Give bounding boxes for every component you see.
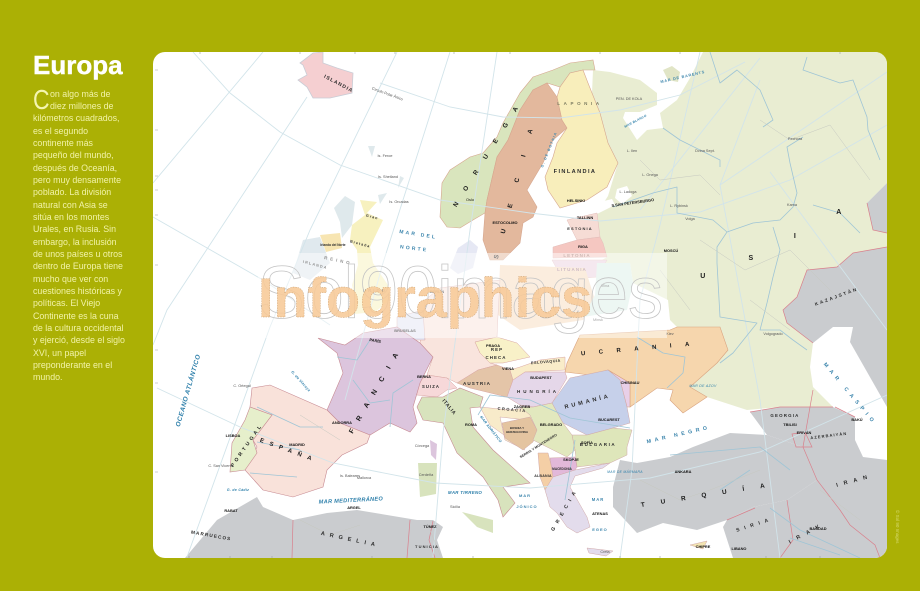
sea labels: MAR CASPIO — [822, 362, 878, 427]
geographic minor labels: Dvina Sept. — [695, 149, 715, 153]
land: other east borders — [292, 203, 887, 558]
capital and city labels: PRAGA — [486, 343, 500, 348]
text block: introduction: Urales, en Rusia. Sin — [33, 224, 116, 234]
country labels: LETONIA — [563, 253, 591, 258]
text block: introduction: y ejerció, desde el siglo — [33, 335, 125, 345]
capital and city labels: ANKARA — [675, 469, 692, 474]
text block: introduction: pero muy densamente — [33, 175, 121, 185]
capital and city labels: CHIPRE — [696, 544, 711, 549]
geographic minor labels: Creta — [600, 550, 611, 554]
geographic minor labels: Vilna — [601, 284, 610, 288]
land: Iceland — [298, 52, 353, 98]
sea labels: NORTE — [400, 244, 429, 254]
country labels: FRANCIA — [348, 344, 405, 435]
country labels: ITALIA — [440, 398, 457, 416]
country labels: SERBIA Y MONTENEGRO — [519, 433, 558, 459]
capital and city labels: ZAGREB — [514, 404, 530, 409]
geographic minor labels: L. Onega — [642, 173, 659, 177]
geographic minor labels: Is. Feroe — [378, 154, 392, 158]
country labels: TUNICIA — [415, 544, 439, 549]
country labels: GEORGIA — [770, 413, 800, 418]
country labels: PORTUGAL — [230, 422, 265, 468]
country labels: AUSTRIA — [463, 381, 491, 386]
text block: introduction: después de Oceanía, — [33, 163, 117, 173]
land: Western Europe — [230, 327, 530, 533]
sea labels: EGEO — [592, 527, 608, 532]
capital and city labels: BRUSELAS — [394, 328, 416, 333]
country labels: BOSNIA Y — [510, 426, 524, 430]
text block: introduction: de unos países u otros — [33, 249, 122, 259]
map panel — [153, 52, 887, 558]
country labels: Irlanda del Norte — [320, 243, 346, 247]
country labels: BULGARIA — [580, 442, 616, 447]
sea labels: JÓNICO — [516, 504, 538, 509]
country labels: Gran — [366, 213, 379, 221]
country labels: HUNGRÍA — [517, 387, 559, 394]
capital and city labels: ESTOCOLMO — [492, 220, 518, 225]
sea labels: MAR DE BARENTS — [660, 70, 705, 84]
capital and city labels: BERLÍN — [430, 289, 444, 294]
capital and city labels: LIBANO — [732, 546, 746, 551]
sea labels: MAR DEL — [399, 229, 437, 241]
geographic minor labels: C. San Vicente — [208, 464, 234, 468]
country labels: GRECIA — [550, 487, 580, 532]
country labels: U — [700, 273, 706, 280]
capital and city labels: LISBOA — [226, 433, 241, 438]
text block: introduction: Continente es la cuna — [33, 311, 119, 321]
sea labels: MAR DE AZOV — [689, 384, 717, 388]
land: central Europe — [397, 240, 633, 407]
geographic minor labels: Kama — [787, 203, 798, 207]
geographic minor labels: PEN. DE KOLA — [616, 97, 643, 101]
geographic minor labels: L. Rybinsk — [670, 204, 688, 208]
text block: introduction: políticas. El Viejo — [33, 298, 100, 308]
country labels: CHECA — [485, 355, 507, 360]
text block: introduction: natural con Asia se — [33, 200, 108, 210]
text block: introduction: kilómetros cuadrados, — [33, 113, 120, 123]
capital and city labels — [224, 197, 863, 551]
rivers — [250, 52, 880, 558]
sea labels: MAR NEGRO — [646, 425, 711, 445]
country labels: LITUANIA — [557, 267, 587, 272]
capital and city labels: S.SAN PETERSBURGO — [611, 197, 654, 208]
geographic minor labels: Volga — [685, 217, 696, 221]
capital and city labels: BUDAPEST — [530, 375, 552, 380]
capital and city labels: BERNA — [417, 374, 431, 379]
country labels: ARGELIA — [320, 531, 380, 549]
geographic minor labels: Is. Orcadas — [389, 200, 409, 204]
land: Ukraine and Moldova — [565, 327, 728, 413]
watermark: outlined word: Sol90images — [258, 251, 663, 334]
text block: introduction: dentro de Europa tiene — [33, 261, 123, 271]
sea labels — [173, 70, 878, 532]
land: eastern grey countries — [185, 183, 887, 558]
country labels: KAZAJSTÁN — [814, 285, 859, 307]
veil behind watermark — [258, 253, 667, 338]
text block: introduction — [33, 84, 125, 382]
capital and city labels: MADRID — [289, 442, 305, 447]
geographic minor labels: Cerdeña — [419, 473, 434, 477]
capital and city labels: VIENA — [502, 366, 514, 371]
sea labels: MAR — [592, 497, 604, 502]
geographic minor labels: Volgogrado — [763, 332, 783, 336]
graticule lines — [153, 52, 887, 558]
geographic minor labels: Minsk — [593, 318, 603, 322]
land: Balkans — [480, 370, 707, 556]
country labels: ESPAÑA — [259, 437, 318, 464]
sea labels: OCEANO ATLÁNTICO — [173, 353, 202, 428]
country labels: UCRANIA — [581, 341, 703, 357]
country labels: AZERBAIYÁN — [810, 431, 848, 440]
text block: introduction: cuestiones históricas y — [33, 286, 122, 296]
text block: introduction: embargo, la inclusión — [33, 237, 117, 247]
text block: introduction: continente más — [33, 138, 93, 148]
sea labels: MAR TIRRENO — [448, 490, 482, 495]
country labels: ALBANIA — [534, 474, 552, 478]
text block: introduction: on algo más de — [50, 88, 110, 98]
capital and city labels: TÚNEZ — [424, 524, 437, 529]
geographic minor labels: Pechora — [788, 137, 803, 141]
capital and city labels: BELGRADO — [540, 422, 562, 427]
geographic minor labels: Córcega — [415, 444, 430, 448]
capital and city labels: Oslo — [466, 197, 474, 202]
text block: introduction: diez millones de — [50, 101, 113, 111]
capital and city labels: BUCAREST — [598, 417, 620, 422]
geographic minor labels — [208, 87, 803, 554]
country labels: TURQUÍA — [640, 478, 781, 509]
text block: introduction: XVI, un papel — [33, 348, 86, 358]
map edge ticks — [155, 52, 840, 558]
geographic minor labels: L. Ladoga — [620, 190, 637, 194]
country labels: I — [794, 233, 796, 240]
capital and city labels: RABAT — [224, 508, 238, 513]
land: Scandinavia and Finland — [440, 60, 618, 260]
country labels: A — [836, 209, 842, 216]
country labels: IRAN — [836, 473, 874, 489]
sea labels: MAR ADRIÁTICO — [479, 415, 503, 444]
land: Baltic states — [552, 213, 607, 280]
sea labels: MAR BLANCO — [624, 113, 648, 129]
watermark: orange word: Infographics — [258, 267, 592, 329]
country labels: REP — [491, 347, 503, 352]
country labels: ISLANDIA — [323, 74, 354, 94]
geographic minor labels: Mallorca — [357, 476, 372, 480]
country labels: MARRUECOS — [191, 530, 232, 542]
text block: introduction: es el segundo — [33, 126, 88, 136]
country labels: CROACIA — [497, 406, 527, 413]
sea labels: MAR — [519, 493, 531, 498]
copyright note: © Sol 90 Images — [895, 510, 900, 543]
geographic minor labels: L. Ilen — [627, 149, 637, 153]
capital and city labels: ANDORRA — [332, 420, 352, 425]
country labels: ESLOVAQUIA — [531, 359, 561, 365]
sea labels: MAR MEDITERRÁNEO — [319, 495, 384, 506]
geographic minor labels: Círculo Polar Ártico — [371, 87, 403, 102]
text block: introduction: mucho que ver con — [33, 274, 108, 284]
country labels: S — [748, 255, 754, 262]
text block: introduction: C — [33, 84, 50, 114]
country labels: IRAK — [788, 521, 827, 545]
country labels: SUIZA — [422, 384, 440, 389]
landmass: Russia — [560, 52, 887, 410]
text block: introduction: poblado. La división — [33, 187, 111, 197]
sea labels: G. DE BOTNIA — [540, 131, 558, 168]
capital and city labels: CHISINAU — [621, 380, 640, 385]
capital and city labels: TBILISI — [783, 422, 797, 427]
text block: introduction: de la cultura occidental — [33, 323, 123, 333]
country labels: MACEDONIA — [552, 467, 573, 471]
geographic minor labels: Kiev — [666, 332, 674, 336]
title: Europa — [33, 50, 123, 80]
geographic minor labels: Sicilia — [450, 505, 461, 509]
land: British Isles — [293, 146, 404, 315]
capital and city labels: ERIVÁN — [797, 430, 812, 435]
capital and city labels: BAKÚ — [851, 417, 863, 422]
geographic minor labels: Is. Baleares — [340, 474, 360, 478]
text block: introduction: mundo. — [33, 372, 62, 382]
capital and city labels: HELSINKI — [567, 198, 585, 203]
capital and city labels: SOFÍA — [581, 440, 593, 445]
text block: introduction: sitúa en los montes — [33, 212, 109, 222]
country labels: RUMANÍA — [564, 391, 611, 411]
capital and city labels: RIGA — [578, 244, 588, 249]
capital and city labels: ATENAS — [592, 511, 608, 516]
capital and city labels: TALLINN — [577, 215, 593, 220]
sea labels: G. de Cádiz — [227, 488, 249, 492]
geographic minor labels: Is. Shetland — [378, 175, 398, 179]
sea labels: G. de Vizcaya — [290, 370, 311, 393]
text block: introduction: preponderante en el — [33, 360, 112, 370]
country labels: REINO — [324, 255, 353, 266]
country labels: IRLANDA — [302, 260, 328, 270]
capital and city labels: SKOPJE — [563, 457, 579, 462]
text block: introduction: pequeño del mundo, — [33, 150, 114, 160]
country labels: SUECIA — [493, 107, 540, 260]
capital and city labels: ROMA — [465, 422, 477, 427]
capital and city labels: PARÍS — [369, 337, 382, 344]
country labels — [191, 74, 874, 549]
capital and city labels: BAGDAD — [809, 526, 827, 531]
country labels: UNIDO — [363, 288, 387, 293]
country labels: Bretaña — [350, 239, 371, 249]
capital and city labels: ARGEL — [347, 505, 361, 510]
country labels: LAPONIA — [557, 101, 603, 106]
country labels: HERZEGOVINA — [506, 430, 529, 434]
country labels: NORUEGA — [452, 94, 527, 208]
sea labels: MAR DE MÁRMARA — [607, 470, 643, 474]
country labels: SIRIA — [736, 516, 774, 534]
geographic minor labels: C. Ortegal — [233, 384, 251, 388]
capital and city labels: MOSCÚ — [664, 248, 678, 253]
country labels: FINLANDIA — [554, 169, 596, 175]
country labels: ESTONIA — [567, 226, 593, 231]
